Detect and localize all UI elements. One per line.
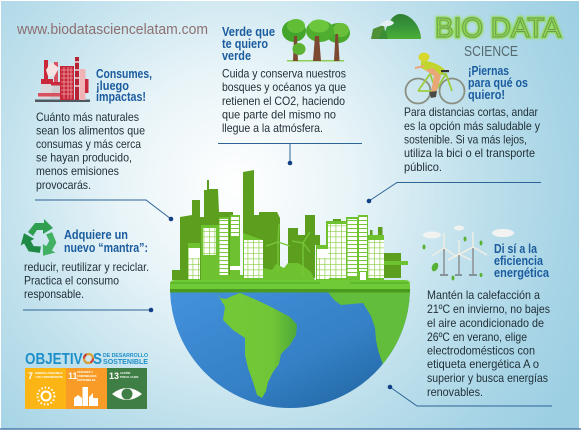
ocean and continents — [170, 291, 412, 411]
sdg title: SOSTENIBLE — [103, 359, 148, 366]
sdg 11 card — [66, 368, 107, 409]
icon: factory — [35, 57, 90, 102]
connector: consumes — [35, 200, 173, 221]
connector: verde — [218, 144, 362, 165]
sdg 11 card: SOSTENIBLES — [77, 378, 96, 382]
body text: piernas: es la opción más saludable y — [404, 119, 540, 133]
continent: south america — [215, 292, 297, 398]
connector: piernas — [367, 182, 541, 203]
body text: eficiencia: Mantén la calefacción a — [427, 288, 540, 302]
heading: eficiencia: Di sí a la — [494, 241, 538, 256]
body text: eficiencia — [427, 288, 550, 399]
heading: mantra: Adquiere un — [64, 227, 128, 242]
dark buildings — [172, 170, 401, 280]
body text: verde: bosques y océanos ya que — [222, 80, 346, 94]
body text: eficiencia: el aire acondicionado de — [427, 316, 544, 330]
body text: piernas — [404, 105, 540, 174]
brand name outline: BIO DATA — [435, 12, 561, 43]
wind turbines — [266, 224, 310, 277]
sdg 7 card: Y NO CONTAMINANTE — [35, 375, 63, 379]
panel: consumes — [35, 57, 173, 221]
body text: eficiencia: etiqueta energética A o — [427, 357, 539, 371]
brand name: BIO DATA — [435, 12, 561, 43]
body text: eficiencia: 21ºC en invierno, no bajes — [427, 302, 550, 316]
sdg title: DE DESARROLLO — [103, 353, 149, 359]
icon: trees — [282, 19, 350, 62]
heading: verde — [222, 24, 275, 63]
logo: bio data science — [371, 12, 561, 60]
sdg 11 card: 11 — [68, 371, 78, 381]
heading: verde: verde — [222, 48, 251, 63]
brand name core: BIO DATA — [435, 12, 561, 43]
body text: consumes: Cuánto más naturales — [36, 110, 139, 124]
light green buildings — [188, 215, 408, 280]
body text: piernas: sostenible. Si va más lejos, — [404, 132, 527, 146]
panel: sdg goals — [25, 351, 149, 409]
icon: recycle — [16, 219, 63, 260]
heading: piernas — [468, 63, 528, 102]
icon: logo dome — [371, 14, 421, 39]
sdg 13 card — [107, 368, 147, 409]
body text: eficiencia: electrodomésticos con — [427, 344, 535, 358]
body text: consumes: consumas y más cerca — [36, 137, 141, 151]
body text: consumes: se hayan producido, — [36, 150, 132, 164]
body text: mantra: Practica el consumo — [24, 274, 119, 288]
icon: wind turbines — [422, 226, 514, 280]
panel: piernas — [367, 52, 541, 203]
bottom rule — [0, 428, 581, 430]
illustration: globe — [170, 291, 412, 411]
bushes — [263, 263, 315, 280]
sdg 11 card: CIUDADES Y — [77, 370, 93, 374]
body text: eficiencia: 26ºC en verano, elige — [427, 330, 527, 344]
body text: verde — [222, 66, 346, 135]
heading: consumes: ¡luego — [96, 78, 129, 93]
sdg 13 card: ACCIÓN — [120, 370, 130, 375]
heading: consumes: impactas! — [96, 89, 146, 104]
body text: piernas: utiliza la bici o el transporte — [404, 146, 535, 160]
body text: piernas: Para distancias cortas, andar — [404, 105, 538, 119]
website url: www.biodatasciencelatam.com — [16, 21, 208, 38]
body text: verde: retienen el CO2, haciendo — [222, 94, 345, 108]
body text: eficiencia: superior y busca energías — [427, 371, 548, 385]
heading: eficiencia: energética — [494, 265, 550, 280]
heading: mantra: nuevo “mantra”: — [64, 240, 148, 255]
heading: piernas: ¡Piernas — [468, 63, 509, 78]
panel: verde — [218, 19, 362, 165]
body text: mantra: responsable. — [24, 287, 84, 301]
body text: eficiencia: renovables. — [427, 385, 483, 399]
heading: piernas: para qué os — [468, 75, 528, 90]
heading: eficiencia: eficiencia — [494, 253, 544, 268]
continent: africa — [328, 292, 412, 365]
sdg 7 card — [25, 368, 66, 409]
body text: mantra — [24, 260, 149, 301]
heading: mantra — [64, 227, 148, 255]
body text: consumes: menos emisiones — [36, 164, 119, 178]
sdg title: OBJETIVOS — [25, 351, 102, 368]
heading: consumes — [96, 66, 152, 104]
heading: piernas: quiero! — [468, 87, 505, 102]
science label: SCIENCE — [464, 43, 518, 60]
heading: eficiencia — [494, 241, 550, 280]
body text: consumes: provocarás. — [36, 178, 91, 192]
heading: consumes: Consumes, — [96, 66, 152, 81]
ground band — [170, 280, 410, 292]
sdg 13 card: POR EL CLIMA — [120, 375, 139, 379]
sdg 13 card: 13 — [109, 371, 119, 381]
icon: cyclist — [406, 52, 464, 104]
panel: mantra — [16, 219, 153, 312]
illustration: green city — [172, 170, 408, 280]
panel: eficiencia — [388, 226, 552, 406]
body text: piernas: público. — [404, 160, 442, 174]
sdg 7 card: ENERGÍA ASEQUIBLE — [35, 370, 63, 375]
ocean — [170, 291, 410, 411]
body text: verde: llegue a la atmósfera. — [222, 121, 323, 135]
white windows — [188, 217, 384, 280]
body text: verde: que parte del mismo no — [222, 108, 336, 122]
body text: consumes — [36, 110, 145, 192]
sdg 11 card: COMUNIDADES — [77, 374, 97, 378]
heading: verde: te quiero — [222, 36, 268, 51]
heading: verde: Verde que — [222, 24, 275, 39]
body text: mantra: reducir, reutilizar y reciclar. — [24, 260, 149, 274]
body text: consumes: sean los alimentos que — [36, 124, 145, 138]
body text: verde: Cuida y conserva nuestros — [222, 66, 346, 80]
sdg 7 card: 7 — [28, 371, 33, 381]
connector: eficiencia — [388, 385, 552, 406]
connector: mantra — [23, 308, 153, 312]
